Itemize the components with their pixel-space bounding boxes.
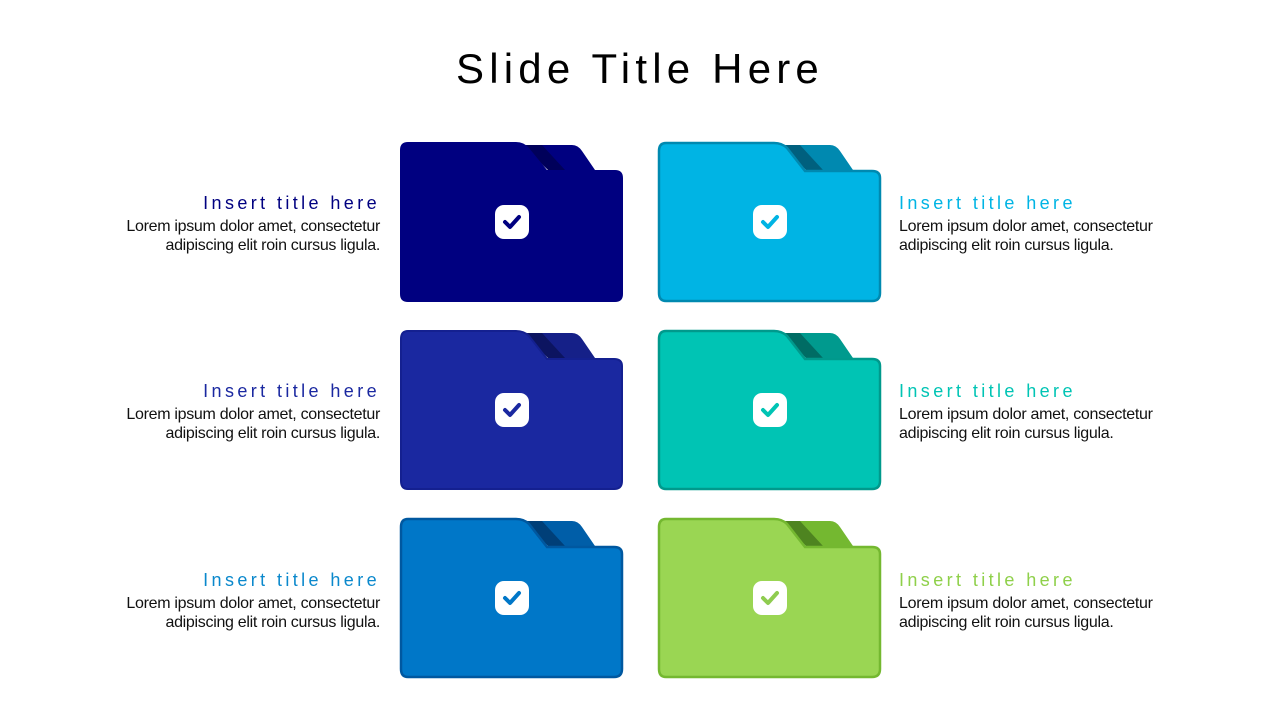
text: right row 2 [899,381,1153,442]
text: right row 1: adipiscing elit roin cursus ligula. [899,237,1114,254]
text: left row 1: Insert title here [203,193,380,213]
folder: royal blue [400,330,623,490]
text: right row 3: adipiscing elit roin cursus ligula. [899,614,1114,631]
text: left row 2 [126,381,380,442]
text: right row 2: Lorem ipsum dolor amet, consectetur [899,406,1153,423]
folder: mid blue [400,518,624,678]
text: left row 2: adipiscing elit roin cursus ligula. [165,425,380,442]
text: left row 1: adipiscing elit roin cursus ligula. [165,237,380,254]
text: right row 3: Lorem ipsum dolor amet, consectetur [899,595,1153,612]
text: left row 1: Lorem ipsum dolor amet, consectetur [126,218,380,235]
text: left row 3: adipiscing elit roin cursus ligula. [165,614,380,631]
text: right row 1: Insert title here [899,193,1076,213]
folder: sky blue [658,142,882,302]
text: right row 1: Lorem ipsum dolor amet, consectetur [899,218,1153,235]
text: right row 2: Insert title here [899,381,1076,401]
folder: teal [658,330,882,490]
text: right row 3: Insert title here [899,570,1076,590]
text: left row 3: Insert title here [203,570,380,590]
text: left row 1 [126,193,380,254]
text: right row 3 [899,570,1153,631]
text: left row 2: Insert title here [203,381,380,401]
title: Slide Title Here [456,45,824,92]
folder: green [658,518,882,678]
text: left row 3: Lorem ipsum dolor amet, consectetur [126,595,380,612]
text: left row 2: Lorem ipsum dolor amet, consectetur [126,406,380,423]
text: right row 2: adipiscing elit roin cursus ligula. [899,425,1114,442]
folder: navy [400,142,623,302]
text: left row 3 [126,570,380,631]
text: right row 1 [899,193,1153,254]
